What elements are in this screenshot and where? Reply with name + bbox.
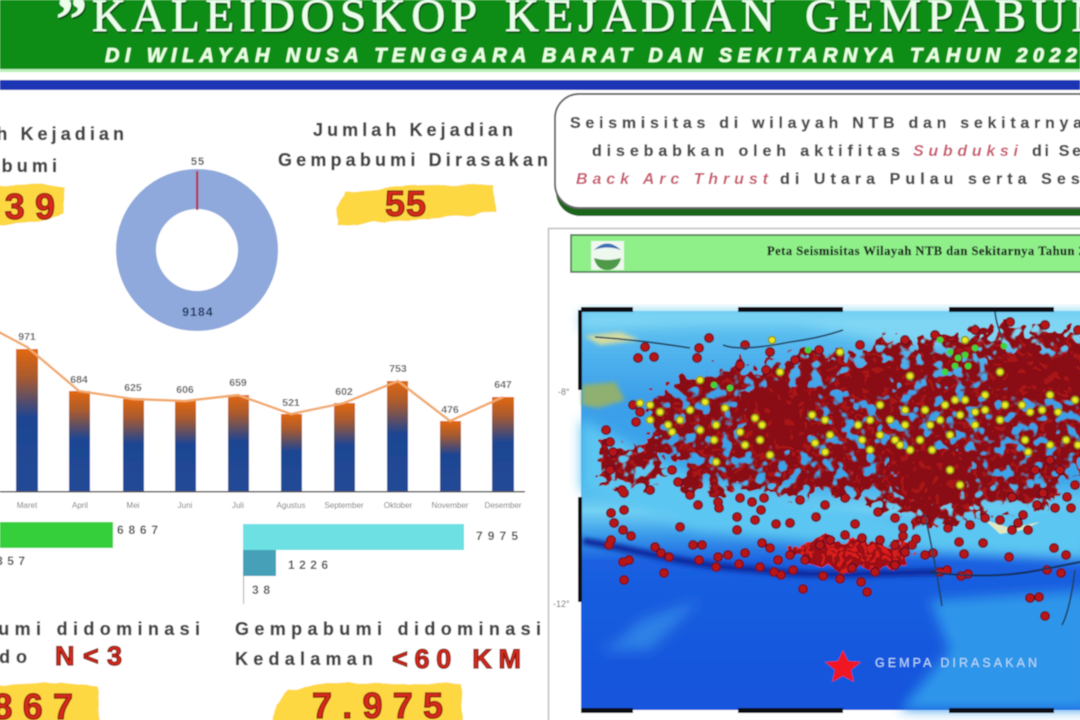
map axis labels: -12°	[553, 599, 570, 609]
value labels: 606	[176, 384, 194, 396]
map bathymetry	[581, 311, 1080, 710]
yellow earthquake dots	[640, 340, 1078, 485]
yellow brush highlight	[0, 682, 100, 720]
axis	[0, 491, 525, 492]
callout text	[570, 115, 1080, 188]
value labels: 971	[18, 331, 36, 343]
icon: red star	[825, 650, 861, 682]
month labels: Agustus	[277, 501, 305, 510]
stat: total earthquakes	[0, 124, 124, 227]
month labels: Maret	[17, 501, 38, 510]
value labels: 625	[124, 382, 142, 394]
value labels: 753	[389, 363, 407, 375]
legend: felt earthquake star	[825, 650, 1037, 682]
dense core west	[738, 385, 815, 455]
title	[56, 0, 1080, 54]
month labels: Juli	[232, 501, 244, 510]
value labels: 659	[229, 377, 247, 389]
donut ring	[136, 189, 258, 311]
value labels: 521	[282, 397, 300, 409]
donut label 9184: 9184	[182, 305, 214, 319]
value labels: 476	[441, 404, 459, 416]
yellow brush highlight	[336, 184, 496, 226]
map axis labels	[553, 387, 570, 609]
depth values: 7975	[476, 529, 518, 543]
month labels: Oktober	[384, 501, 413, 510]
value labels	[18, 331, 512, 416]
dense core south	[885, 448, 975, 505]
donut chart	[136, 156, 258, 319]
yellow brush highlight	[272, 683, 464, 720]
callout text: Back Arc Thrust	[576, 171, 769, 188]
header green band	[0, 0, 1080, 69]
month labels: Mei	[127, 501, 140, 510]
stat: depth dominance: Kedalaman	[235, 649, 373, 669]
legend text: GEMPA DIRASAKAN	[875, 656, 1037, 670]
map title banner	[571, 235, 1080, 272]
magnitude values: 6867	[117, 523, 158, 537]
month labels: Juni	[178, 501, 193, 510]
header banner	[0, 0, 1080, 90]
callout text: Seismisitas di wilayah NTB dan sekitarnya	[570, 115, 1080, 132]
callout: seismicity text	[555, 94, 1080, 216]
depth label: Gempabumi didominasi	[235, 619, 541, 639]
dense core north	[835, 358, 910, 396]
trench bright cluster	[790, 538, 915, 572]
magnitude bar chart	[0, 522, 158, 568]
callout text: disebabkan oleh aktifitas	[592, 143, 900, 160]
value labels: 602	[335, 386, 353, 398]
stat: depth dominance	[235, 619, 541, 720]
month labels	[17, 501, 522, 510]
callout shadow	[556, 100, 1080, 216]
felt slice	[196, 171, 198, 210]
value labels: 684	[70, 374, 88, 386]
month labels: November	[432, 501, 469, 510]
shallow bar	[243, 524, 464, 550]
left cluster	[600, 445, 665, 488]
map axis labels: -8°	[558, 387, 570, 397]
callout text: Subduksi	[913, 143, 1019, 160]
green earthquake dots	[714, 340, 1004, 388]
month labels: Desember	[485, 501, 522, 510]
panel: seismicity map	[548, 228, 1080, 720]
depth bar chart	[243, 524, 518, 604]
seismicity red mass	[600, 328, 1080, 572]
bars	[16, 349, 514, 491]
header light rule	[0, 69, 1080, 72]
stat: felt earthquakes	[278, 120, 548, 226]
fault lines	[595, 312, 1080, 625]
month labels: April	[72, 501, 88, 510]
value labels: 647	[494, 379, 512, 391]
month labels: September	[324, 501, 364, 510]
<60 KM: <60 KM	[392, 644, 521, 674]
map border ticks	[578, 307, 1054, 713]
land patches	[582, 332, 1040, 534]
header blue stripe	[0, 80, 1080, 90]
N<3: N<3	[55, 641, 122, 671]
donut label 55: 55	[191, 156, 205, 168]
map sea base	[581, 311, 1080, 710]
magnitude bar	[0, 522, 113, 548]
main cloud with gaps	[650, 328, 1080, 530]
red earthquake dots	[606, 322, 1078, 616]
stat: magnitude dominance	[0, 619, 200, 720]
felt label: Jumlah Kejadian	[313, 120, 513, 140]
yellow brush highlight	[0, 184, 64, 226]
stat: felt earthquakes: Gempabumi Dirasakan	[278, 150, 548, 170]
medium bar	[243, 550, 276, 576]
felt value: 55	[385, 183, 426, 224]
callout box	[555, 94, 1080, 208]
subtitle: DI WILAYAH NUSA TENGGARA BARAT DAN SEKITARNYA TAHUN 2022	[105, 45, 1077, 67]
depth axis	[243, 524, 244, 604]
depth bar chart: 1226	[288, 558, 328, 572]
trend line	[0, 330, 503, 421]
map frame	[548, 228, 1080, 720]
icon: BMKG logo	[591, 241, 624, 270]
monthly bar chart	[0, 330, 525, 510]
depth bar chart: 38	[252, 583, 270, 597]
